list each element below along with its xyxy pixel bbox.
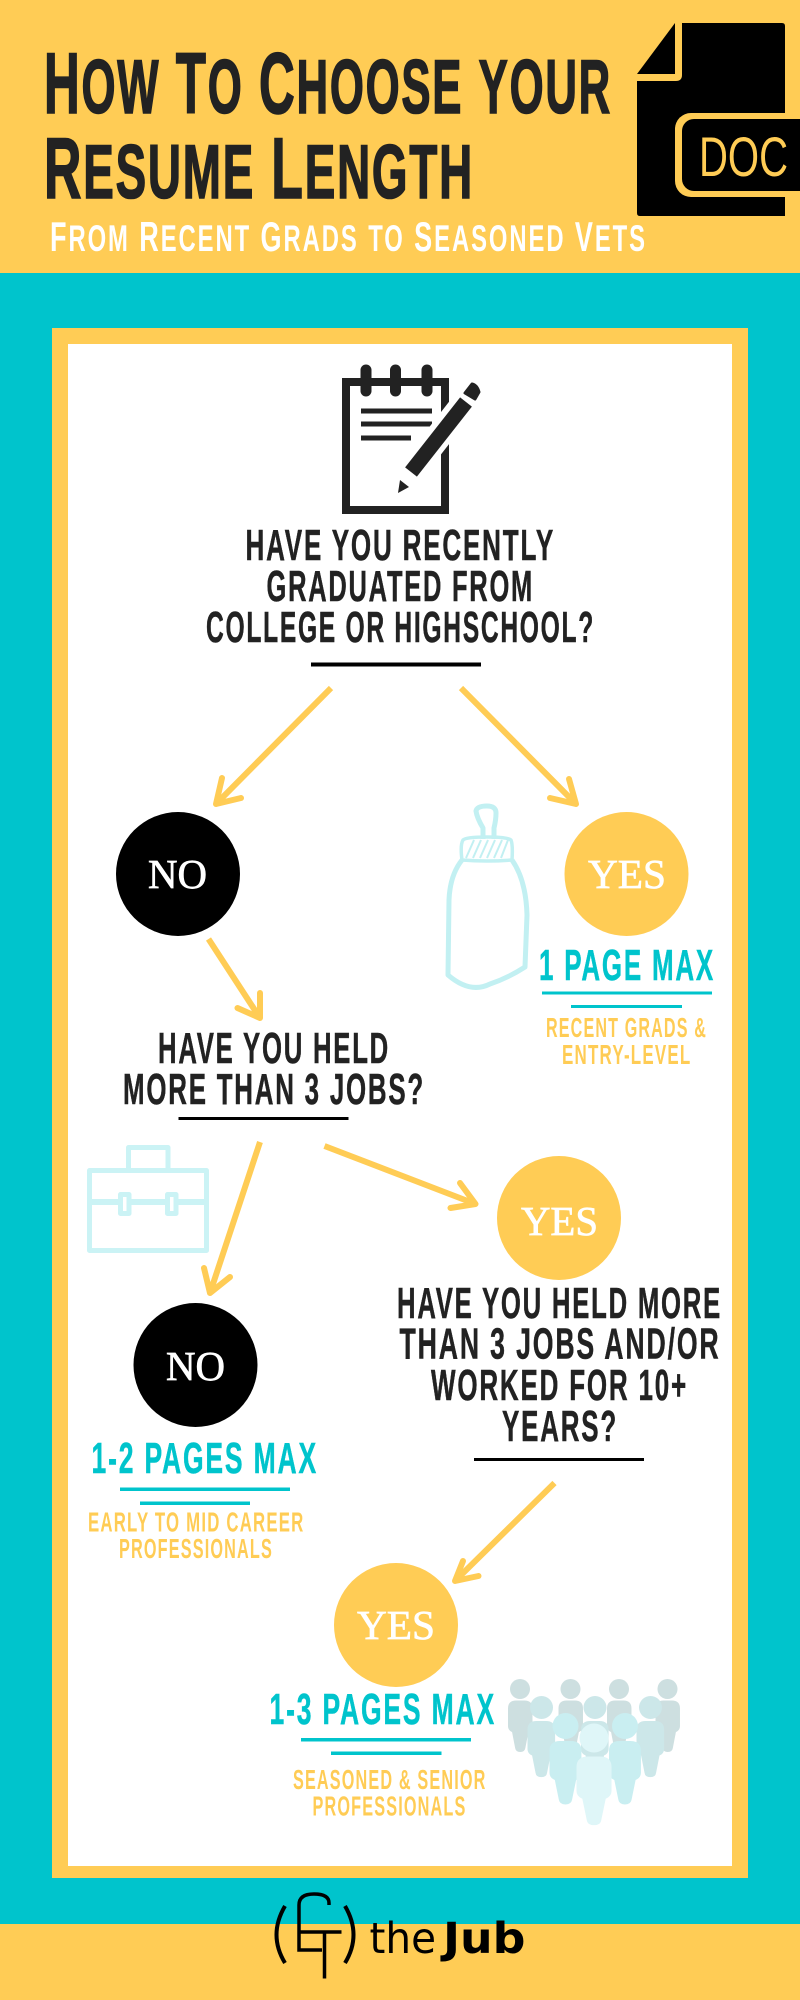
- result: 1 page max: [539, 942, 715, 1070]
- yes circle 1: [564, 812, 688, 936]
- question 1 rule: [311, 662, 481, 666]
- arrow: question 3 to yes: [455, 1483, 554, 1581]
- question 1: GRADUATED FROM: [266, 563, 534, 611]
- result: 1-2 pages max: EARLY TO MID CAREER: [88, 1506, 304, 1538]
- header band: [0, 0, 800, 273]
- yes circle 1: YES: [588, 851, 666, 897]
- result: 1-3 pages max: [270, 1686, 496, 1822]
- icon: baby bottle: [448, 806, 527, 987]
- icon: notepad and pencil: [346, 370, 479, 510]
- title: RESUME LENGTH: [44, 121, 474, 217]
- yes circle 3: [334, 1563, 458, 1687]
- title: [44, 36, 612, 217]
- question 3 rule: [474, 1458, 644, 1461]
- yes circle 3: YES: [357, 1602, 435, 1648]
- arrow: to yes: [461, 688, 576, 804]
- no circle 2: NO: [166, 1343, 225, 1389]
- title: HOW TO CHOOSE YOUR: [44, 36, 612, 132]
- question 2: HAVE YOU HELD: [158, 1025, 390, 1073]
- question 2: [123, 1025, 425, 1114]
- no circle 1: [116, 812, 240, 936]
- question 2 rule: [178, 1117, 348, 1120]
- icon: doc file: [637, 23, 800, 216]
- result: 1-3 pages max: SEASONED & SENIOR: [293, 1764, 486, 1795]
- result: 1-3 pages max: 1-3 PAGES MAX: [270, 1686, 496, 1734]
- question 1: HAVE YOU RECENTLY: [246, 522, 555, 570]
- panel: flowchart: [52, 328, 748, 1878]
- arrow: question 2 to no: [204, 1142, 260, 1293]
- logo: the Jub: [276, 1894, 526, 1978]
- result: 1-2 pages max: [88, 1435, 318, 1564]
- result: 1 page max: ENTRY-LEVEL: [562, 1039, 692, 1070]
- arrow: to no: [216, 688, 331, 804]
- arrow: no to question 2: [208, 939, 260, 1018]
- icon: briefcase: [90, 1148, 206, 1250]
- result: 1-2 pages max: PROFESSIONALS: [119, 1533, 273, 1564]
- subtitle: FROM RECENT GRADS TO SEASONED VETS: [50, 213, 647, 260]
- footer band: [0, 1924, 800, 2000]
- logo: the Jub: the: [370, 1914, 436, 1964]
- yes circle 2: YES: [521, 1198, 598, 1244]
- logo: the Jub: Jub: [440, 1914, 526, 1964]
- result: 1-3 pages max: PROFESSIONALS: [312, 1790, 466, 1822]
- no circle 1: NO: [148, 851, 207, 897]
- question 3: [397, 1280, 722, 1451]
- question 1: [206, 522, 595, 652]
- yes circle 2: [497, 1156, 621, 1280]
- icon: group of people: [508, 1679, 680, 1825]
- arrow: question 2 to yes: [324, 1146, 476, 1208]
- question 2: MORE THAN 3 JOBS?: [123, 1066, 425, 1114]
- no circle 2: [134, 1303, 258, 1427]
- question 3: YEARS?: [502, 1403, 618, 1451]
- result: 1-2 pages max: 1-2 PAGES MAX: [92, 1435, 318, 1483]
